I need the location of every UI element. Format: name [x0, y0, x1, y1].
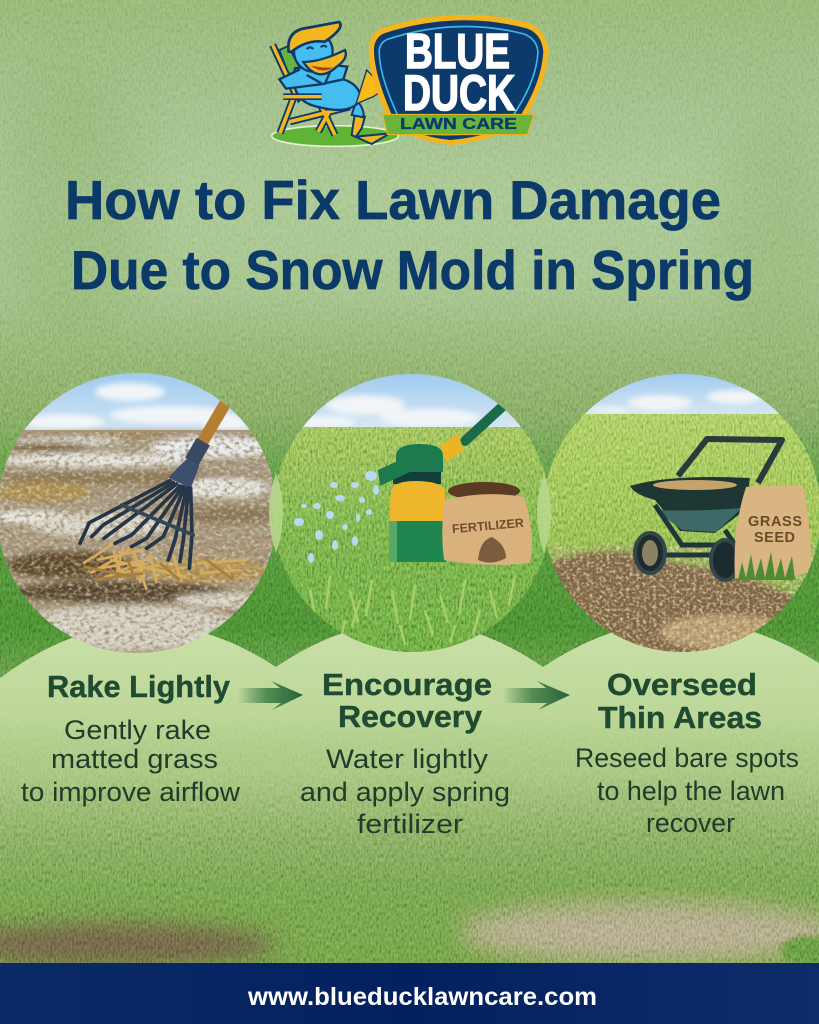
icon: grass seed bag: SEED: [754, 530, 795, 546]
bag label: GRASS SEED: GRASS: [748, 514, 802, 530]
heading: Encourage Recovery: [322, 667, 492, 734]
footer band: [0, 963, 819, 1024]
text block: step 2 description: Water lightly: [326, 744, 489, 774]
icon: sprayer bottle: [378, 406, 503, 562]
icon: straw thatch: [83, 540, 247, 590]
icon: duck mascot on lawn chair: [272, 22, 398, 146]
soil patch: [545, 551, 800, 660]
text block: step 3 description: to help the lawn: [597, 776, 785, 806]
text block: step 3 description: Reseed bare spots: [575, 743, 799, 773]
step 1 text: [21, 669, 241, 807]
icon: rake: [80, 400, 227, 568]
text block: step 1 description: matted grass: [51, 744, 218, 774]
heading: Encourage Recovery: Encourage: [322, 667, 492, 702]
lens highlight between circles 2 and 3: [537, 473, 551, 553]
panel: step 3 seed spreader image: [540, 370, 819, 660]
title: [65, 169, 754, 301]
text block: step 1 description: Gently rake: [64, 715, 211, 745]
title: How to Fix Lawn Damage: [65, 169, 721, 231]
text block: step 1 description: [21, 715, 241, 807]
text block: step 2 description: [300, 744, 510, 839]
logo: Blue Duck Lawn Care: [272, 15, 549, 146]
text block: step 2 description: and apply spring: [300, 777, 510, 807]
logo text: LAWN CARE: LAWN CARE: [400, 116, 517, 133]
logo badge: [369, 15, 549, 145]
lens highlight between circles 1 and 2: [269, 473, 283, 553]
step 3 text: [575, 667, 799, 838]
icon: water droplets: [294, 471, 379, 563]
logo text: DUCK: DUCK: [403, 65, 515, 121]
text block: step 2 description: fertilizer: [357, 809, 463, 839]
icon: fertilizer bag: [442, 482, 532, 565]
panel: step 1 raking image: [0, 370, 285, 657]
heading: Overseed Thin Areas: Thin Areas: [598, 700, 762, 735]
text block: step 3 description: [575, 743, 799, 838]
arrow: step 2 to step 3: [503, 681, 570, 710]
text block: step 3 description: recover: [646, 808, 735, 838]
step 2 text: [300, 667, 510, 839]
bag label: FERTILIZER: FERTILIZER: [451, 516, 524, 536]
text block: step 1 description: to improve airflow: [21, 777, 241, 807]
footer url: www.blueducklawncare.com: [247, 983, 597, 1011]
panel: scalloped step captions backdrop: [0, 620, 819, 835]
heading: Rake Lightly: Rake Lightly: [47, 669, 231, 704]
panel: step 2 watering and fertilizer image: [270, 370, 555, 657]
heading: Overseed Thin Areas: [598, 667, 762, 735]
icon: seed spreader: [630, 439, 782, 580]
heading: Overseed Thin Areas: Overseed: [607, 667, 757, 702]
heading: Encourage Recovery: Recovery: [338, 699, 483, 734]
title: Due to Snow Mold in Spring: [71, 239, 754, 301]
logo text: BLUE: BLUE: [405, 25, 510, 79]
icon: grass blades: [310, 575, 515, 645]
arrow: step 1 to step 2: [238, 681, 303, 710]
icon: grass seed bag: [734, 485, 811, 580]
